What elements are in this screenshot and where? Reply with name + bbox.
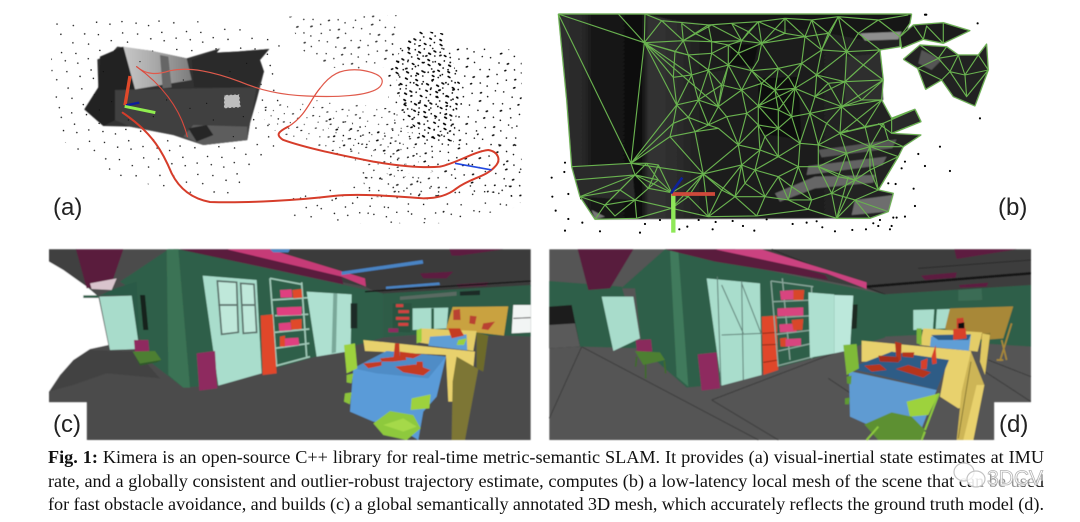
left cabinet	[707, 278, 762, 386]
label (a): (a)	[53, 194, 82, 221]
back wall right	[885, 285, 1031, 347]
back wall left	[549, 281, 640, 348]
door	[602, 297, 640, 351]
scene mesh surface	[558, 14, 921, 219]
caption: line 3: for fast obstacle avoidance, and builds (c) a global semantically annotated 3D mesh, which accurately reflects the ground truth model (d).	[48, 494, 1044, 514]
lime chairs	[843, 344, 859, 375]
label (b): (b)	[998, 194, 1027, 221]
door	[99, 296, 139, 350]
sparse points over mesh	[99, 62, 247, 137]
panel (d): ground truth model	[549, 249, 1032, 441]
axes: start pose	[125, 76, 155, 113]
near desk	[849, 371, 937, 428]
red desk items	[864, 342, 937, 378]
label tab	[49, 402, 87, 441]
right cabinets	[808, 292, 834, 358]
left walls	[120, 249, 383, 388]
panel (c): semantic 3D mesh	[49, 249, 531, 441]
floor	[549, 249, 1031, 440]
partition side panels	[957, 352, 984, 440]
floor	[49, 249, 531, 440]
ceiling duct: maroon	[76, 249, 123, 288]
panel (b): low-latency local mesh	[552, 14, 988, 233]
semi-dense mesh	[84, 47, 269, 145]
purple bin	[197, 351, 217, 391]
far room objects	[393, 303, 412, 332]
ceiling items	[954, 249, 1017, 259]
near partition	[862, 341, 983, 408]
left cabinet	[203, 276, 262, 386]
side walls	[621, 249, 885, 388]
panel (a): visual-inertial trajectory and point cloud	[50, 15, 522, 223]
wireframe edges	[558, 14, 988, 219]
label tab	[994, 402, 1032, 441]
label (d): (d)	[999, 411, 1028, 438]
ceiling	[549, 249, 1031, 295]
axis: end pose	[455, 163, 492, 170]
near desk	[350, 351, 446, 440]
unmapped white area	[49, 262, 108, 392]
label (c): (c)	[53, 411, 81, 438]
back wall	[383, 285, 531, 338]
blue pipes	[342, 260, 423, 275]
orange drawers	[762, 316, 778, 375]
watermark: 3DCV: 3DCV	[987, 467, 1043, 490]
red desk items	[363, 343, 431, 376]
purple bin	[698, 352, 720, 391]
red cylinder	[261, 314, 277, 375]
pink beam	[180, 249, 343, 284]
far objects	[913, 309, 950, 330]
lime chairs	[344, 343, 357, 373]
mesh islands	[892, 23, 988, 133]
point cloud	[50, 15, 522, 223]
caption: line 2: rate, and a globally consistent and outlier-robust trajectory estimate, computes (b) a low-latency local mesh of the scene that can be used	[48, 471, 1044, 491]
caption: line 1: Fig. 1: Kimera is an open-source C++ library for real-time metric-semantic SLAM. It provides (a) visual-inertial state estimates at IMU	[48, 447, 1044, 467]
axes	[671, 178, 715, 233]
near partition	[363, 340, 475, 402]
shelf	[270, 278, 307, 367]
ceiling	[49, 249, 531, 295]
bin and bench	[134, 340, 149, 352]
maroon ceiling patches	[420, 272, 453, 278]
pink beam	[665, 249, 828, 280]
shelf	[771, 278, 813, 367]
trajectory	[123, 67, 498, 202]
landmark points	[552, 15, 980, 233]
olive partition	[452, 357, 478, 440]
bin and bench	[636, 339, 652, 352]
ceiling duct	[578, 249, 633, 290]
right cabinet	[307, 292, 352, 357]
checkerboard	[224, 94, 241, 108]
